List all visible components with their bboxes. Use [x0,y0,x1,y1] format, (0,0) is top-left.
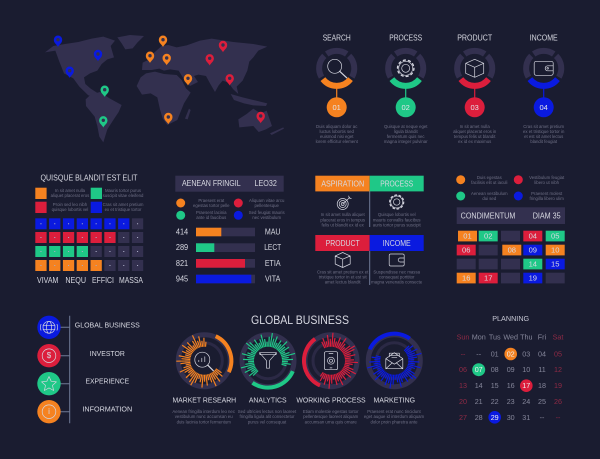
heading: GLOBAL BUSINESS [251,313,349,327]
descriptions [172,409,425,424]
weekday header: Thu [520,332,532,342]
bar chart: ETIA [265,259,281,268]
legend: libero ut nibh [534,180,560,185]
descriptions: felis ut blandit ex id ex [322,222,365,228]
descriptions: pellentesque laoreet aliquam [303,414,359,419]
list labels: GLOBAL BUSINESS [75,320,140,330]
dates: 01 [491,350,499,358]
descriptions: amet lectus blandit [325,280,361,284]
header bar: LEO32 [255,179,277,188]
dates: 27 [459,413,467,422]
list labels: EXPERIENCE [85,376,129,386]
heading: PLANNING [492,314,529,323]
weekday header: Wed [503,332,518,342]
chart: analytics [231,322,300,391]
legend: aliquet placerat eros [51,193,89,198]
schedule grid: 14 [529,260,537,268]
dates: 11 [538,365,546,374]
ring [319,51,354,98]
cell grid [35,218,143,271]
dates: 20 [459,397,467,406]
aspiration header: ASPIRATION [321,178,364,188]
panel: income step [523,34,565,144]
icon: star [37,372,61,395]
process header: PROCESS [380,178,414,188]
description [523,124,565,144]
dates: 19 [554,381,562,390]
descriptions: Etiam molestie egestas tortor [303,409,359,414]
map pins: blue [54,36,102,78]
panel: quisque grid [35,174,144,285]
description: lorem efficitur element [316,139,359,144]
income header: INCOME [383,238,411,248]
header bar: CONDIMENTUM [461,211,515,221]
legend: Praesent molest [531,191,563,196]
bar chart: 821 [176,259,189,268]
schedule grid: 01 [463,232,472,240]
dates: 05 [554,350,562,358]
panel: aspiration quadrant [315,176,424,285]
map pins: red [206,41,265,123]
header bar: AENEAN FRINGIL [182,179,241,188]
description [453,124,497,144]
column labels [37,276,143,285]
divider lines [369,191,371,285]
schedule grid: 05 [551,232,559,240]
weekday header: Tus [489,332,501,342]
column labels: MASSA [119,276,143,285]
weekday header: Mon [472,332,486,342]
dates: 21 [475,397,483,406]
schedule grid: 16 [462,274,470,282]
panel: aenean fringil bars [175,176,285,284]
dates: 18 [538,381,546,390]
header bar: DIAM 35 [533,211,561,221]
panel: process step [384,34,428,144]
schedule grid: 17 [484,274,492,282]
icon: dollar: $ [47,351,52,360]
weekday header [457,332,563,342]
description: magna integer pulvinar [384,139,428,144]
column labels: VIVAM [37,276,58,285]
legend [35,188,144,213]
legend: Vestibulum feugiat [529,175,565,180]
dates: 30 [507,413,515,422]
ring [457,51,492,98]
header bar [175,176,284,192]
icon: magnifier [328,59,347,78]
chart: market research [166,330,235,398]
dates: 06 [459,365,467,374]
icon: gear [390,195,404,209]
descriptions: placerat eros in tempus [320,218,365,222]
icon: magnifier [195,352,213,371]
dates: 08 [491,365,499,374]
dates: -- [556,413,561,422]
dates: 10 [522,365,530,374]
number badge: 03 [471,103,479,112]
dates: 15 [491,381,499,390]
heading: QUISQUE BLANDIT EST ELIT [40,174,138,182]
panel: global business [166,313,431,424]
descriptions: Quisque lobortis vel [378,212,416,217]
dates: 07 [475,365,483,374]
description [384,124,428,144]
legend: facilisis elit ut iaculi [471,180,507,185]
description: euismod nisi eget [320,134,354,139]
icon: target [337,196,351,210]
panel: search step [316,34,359,144]
description: Duis aliquam dolor ac [316,124,358,129]
dates: 31 [522,413,530,422]
number badge: 04 [540,103,548,112]
legend: egestas tortor pelle [193,203,230,208]
list labels [75,320,140,414]
schedule grid [457,231,565,283]
dates: 04 [538,350,546,358]
icon: open envelope [386,353,403,369]
icon: box [335,252,350,268]
description: Cras sit amet pretium [523,124,565,129]
description: Quisque at neque eget [384,124,428,129]
ring [388,51,423,98]
descriptions: Aenean fringilla interdum leo nec [172,409,236,414]
descriptions: Sed ultricies lectus non laoreet [238,409,297,414]
column labels: EFFICI [92,276,114,285]
dates: 12 [554,365,562,374]
descriptions: dolor proin pharetra ante [370,420,418,424]
bar chart: LECT [264,243,281,252]
description: fermentum quis nec [387,134,425,139]
legend [456,175,565,201]
weekday header: Sun [457,332,469,342]
dates: 09 [507,365,515,374]
number badge: 02 [402,103,410,112]
descriptions: consequat porttitor [379,274,415,280]
icon: tablet gear [324,352,338,370]
schedule grid: 08 [508,246,516,254]
description: tempus felis ut blandit [454,134,496,139]
schedule grid: 04 [529,232,537,240]
panel: timeline list [37,316,140,423]
dates: 26 [554,397,562,406]
ring [526,51,561,98]
legend: quisque lobortis vel [52,207,88,212]
bar chart [176,228,281,284]
legend: Praesent lacinia [196,210,227,215]
dates: 03 [522,350,530,358]
chart labels: MARKET RESEARH [172,396,236,404]
description: ligula blandit [394,129,418,134]
dates: 29 [491,413,499,422]
pin centres [56,38,262,122]
panel: world map [45,35,284,142]
legend: nec vestibulum [252,215,281,220]
descriptions: Suspendisse nec massa [373,270,421,274]
description: ex et tristique tortor in [523,129,565,134]
legend: ex et tristique tortor [105,207,142,212]
description: In sit amet nulla [460,124,490,129]
dates: 02 [507,350,515,358]
chart: working process [303,326,368,393]
legend: Proin sed leo nibh [53,202,88,207]
legend: Aliquam vitae arcu [249,198,285,203]
descriptions: vestibulum nunc accumsan eu [175,414,233,419]
icon: info: i [48,407,50,416]
description: aliquet placerat eros in [453,129,497,134]
description: et est sit amet lectus [524,134,563,139]
heading: PROCESS [389,34,423,42]
descriptions: eget augue id interdum aliquam [364,414,425,419]
schedule grid: 15 [551,260,559,268]
dates: 17 [522,381,530,390]
weekday header: Sat [553,332,563,342]
legend [176,198,285,220]
bar chart: 945 [176,274,189,284]
descriptions: auris tortor purus suscipit [373,222,421,228]
map pins: green [99,86,109,128]
descriptions: magna venenatis consecte [371,280,423,284]
panel: planning calendar [457,314,563,424]
legend: dui sed [482,196,497,201]
legend: pellentesque [255,203,279,208]
number badge: 01 [333,103,341,112]
legend: Aenean vestibulum [471,191,508,196]
descriptions: Praesent erat nunc tincidunt [367,409,422,414]
list labels: INFORMATION [82,404,132,414]
dates: -- [476,350,482,358]
chart labels: ANALYTICS [249,396,287,404]
description: luctus lobortis sed [319,129,354,134]
descriptions: tristique tortor in et est sit [319,274,367,280]
descriptions: mauris convallis faucibus [373,218,421,222]
header bar [457,207,565,224]
legend: suscipit vitae eleifend [103,193,144,198]
dates: 22 [491,397,499,406]
chart labels: WORKING PROCESS [296,396,366,404]
legend: In sit amet nulla [55,188,86,193]
dates: -- [540,413,545,422]
schedule grid: 10 [551,246,559,254]
dates: 23 [507,397,515,406]
descriptions: purus vel consequat [248,420,287,424]
bar chart: VITA [265,274,281,284]
legend: ante id faucibus [196,215,226,220]
dates: 14 [475,381,483,390]
description [316,124,359,144]
panel: product step [453,34,497,144]
map pins: orange [146,36,192,124]
legend: Cras sit amet pretium [103,202,144,207]
description: blandit feugiat [530,139,558,144]
dates: -- [461,350,466,358]
weekday header: Fri [538,332,547,342]
icon: wallet [534,61,553,75]
bar chart: 289 [176,243,189,252]
descriptions: Cras sit amet pretium ex et [317,270,369,274]
legend: Praesent erat [198,198,225,203]
schedule grid: 19 [529,274,537,282]
icon: gear [398,60,414,76]
descriptions [317,212,423,284]
heading: INCOME [530,34,558,42]
descriptions: accumsan urna quis ornare [305,420,357,424]
icon: globe [37,316,61,339]
timeline spine [49,316,70,423]
dates: 24 [522,397,530,406]
dates: 25 [538,397,546,406]
chart labels: MARKETING [373,396,415,404]
list labels: INVESTOR [90,349,125,358]
icon: wallet [389,254,404,266]
product header: PRODUCT [326,238,360,248]
dates: 13 [459,381,467,390]
chart labels [172,396,415,404]
dates: 16 [507,381,515,390]
bar chart: MAU [265,228,281,236]
date highlights [472,348,533,424]
dates [459,350,562,422]
icon: funnel [260,353,276,368]
icon: box [466,59,484,77]
description: ex id ex maximus [458,139,491,144]
legend: fringilla libero ulim [530,196,564,201]
legend: Mauris tortor purus [105,188,141,193]
schedule grid: 02 [484,232,492,240]
descriptions: In sit amet nulla aliquet [321,212,365,217]
heading: SEARCH [323,34,351,42]
schedule grid: 09 [529,246,537,254]
heading: PRODUCT [457,34,492,42]
legend: Duis egestas [477,175,502,180]
schedule grid: 06 [462,246,470,254]
chart: marketing [362,330,431,399]
bar chart: 414 [176,228,189,236]
descriptions: fringilla ligula alit consectetur [240,414,295,419]
column labels: NEQU [65,276,86,285]
dates: 28 [475,413,483,422]
legend: Sed feugiat mauris [249,210,285,215]
panel: condimentum schedule [456,175,565,283]
descriptions: duis lacinia tortor fermentum [177,420,231,424]
map continents [45,35,284,142]
